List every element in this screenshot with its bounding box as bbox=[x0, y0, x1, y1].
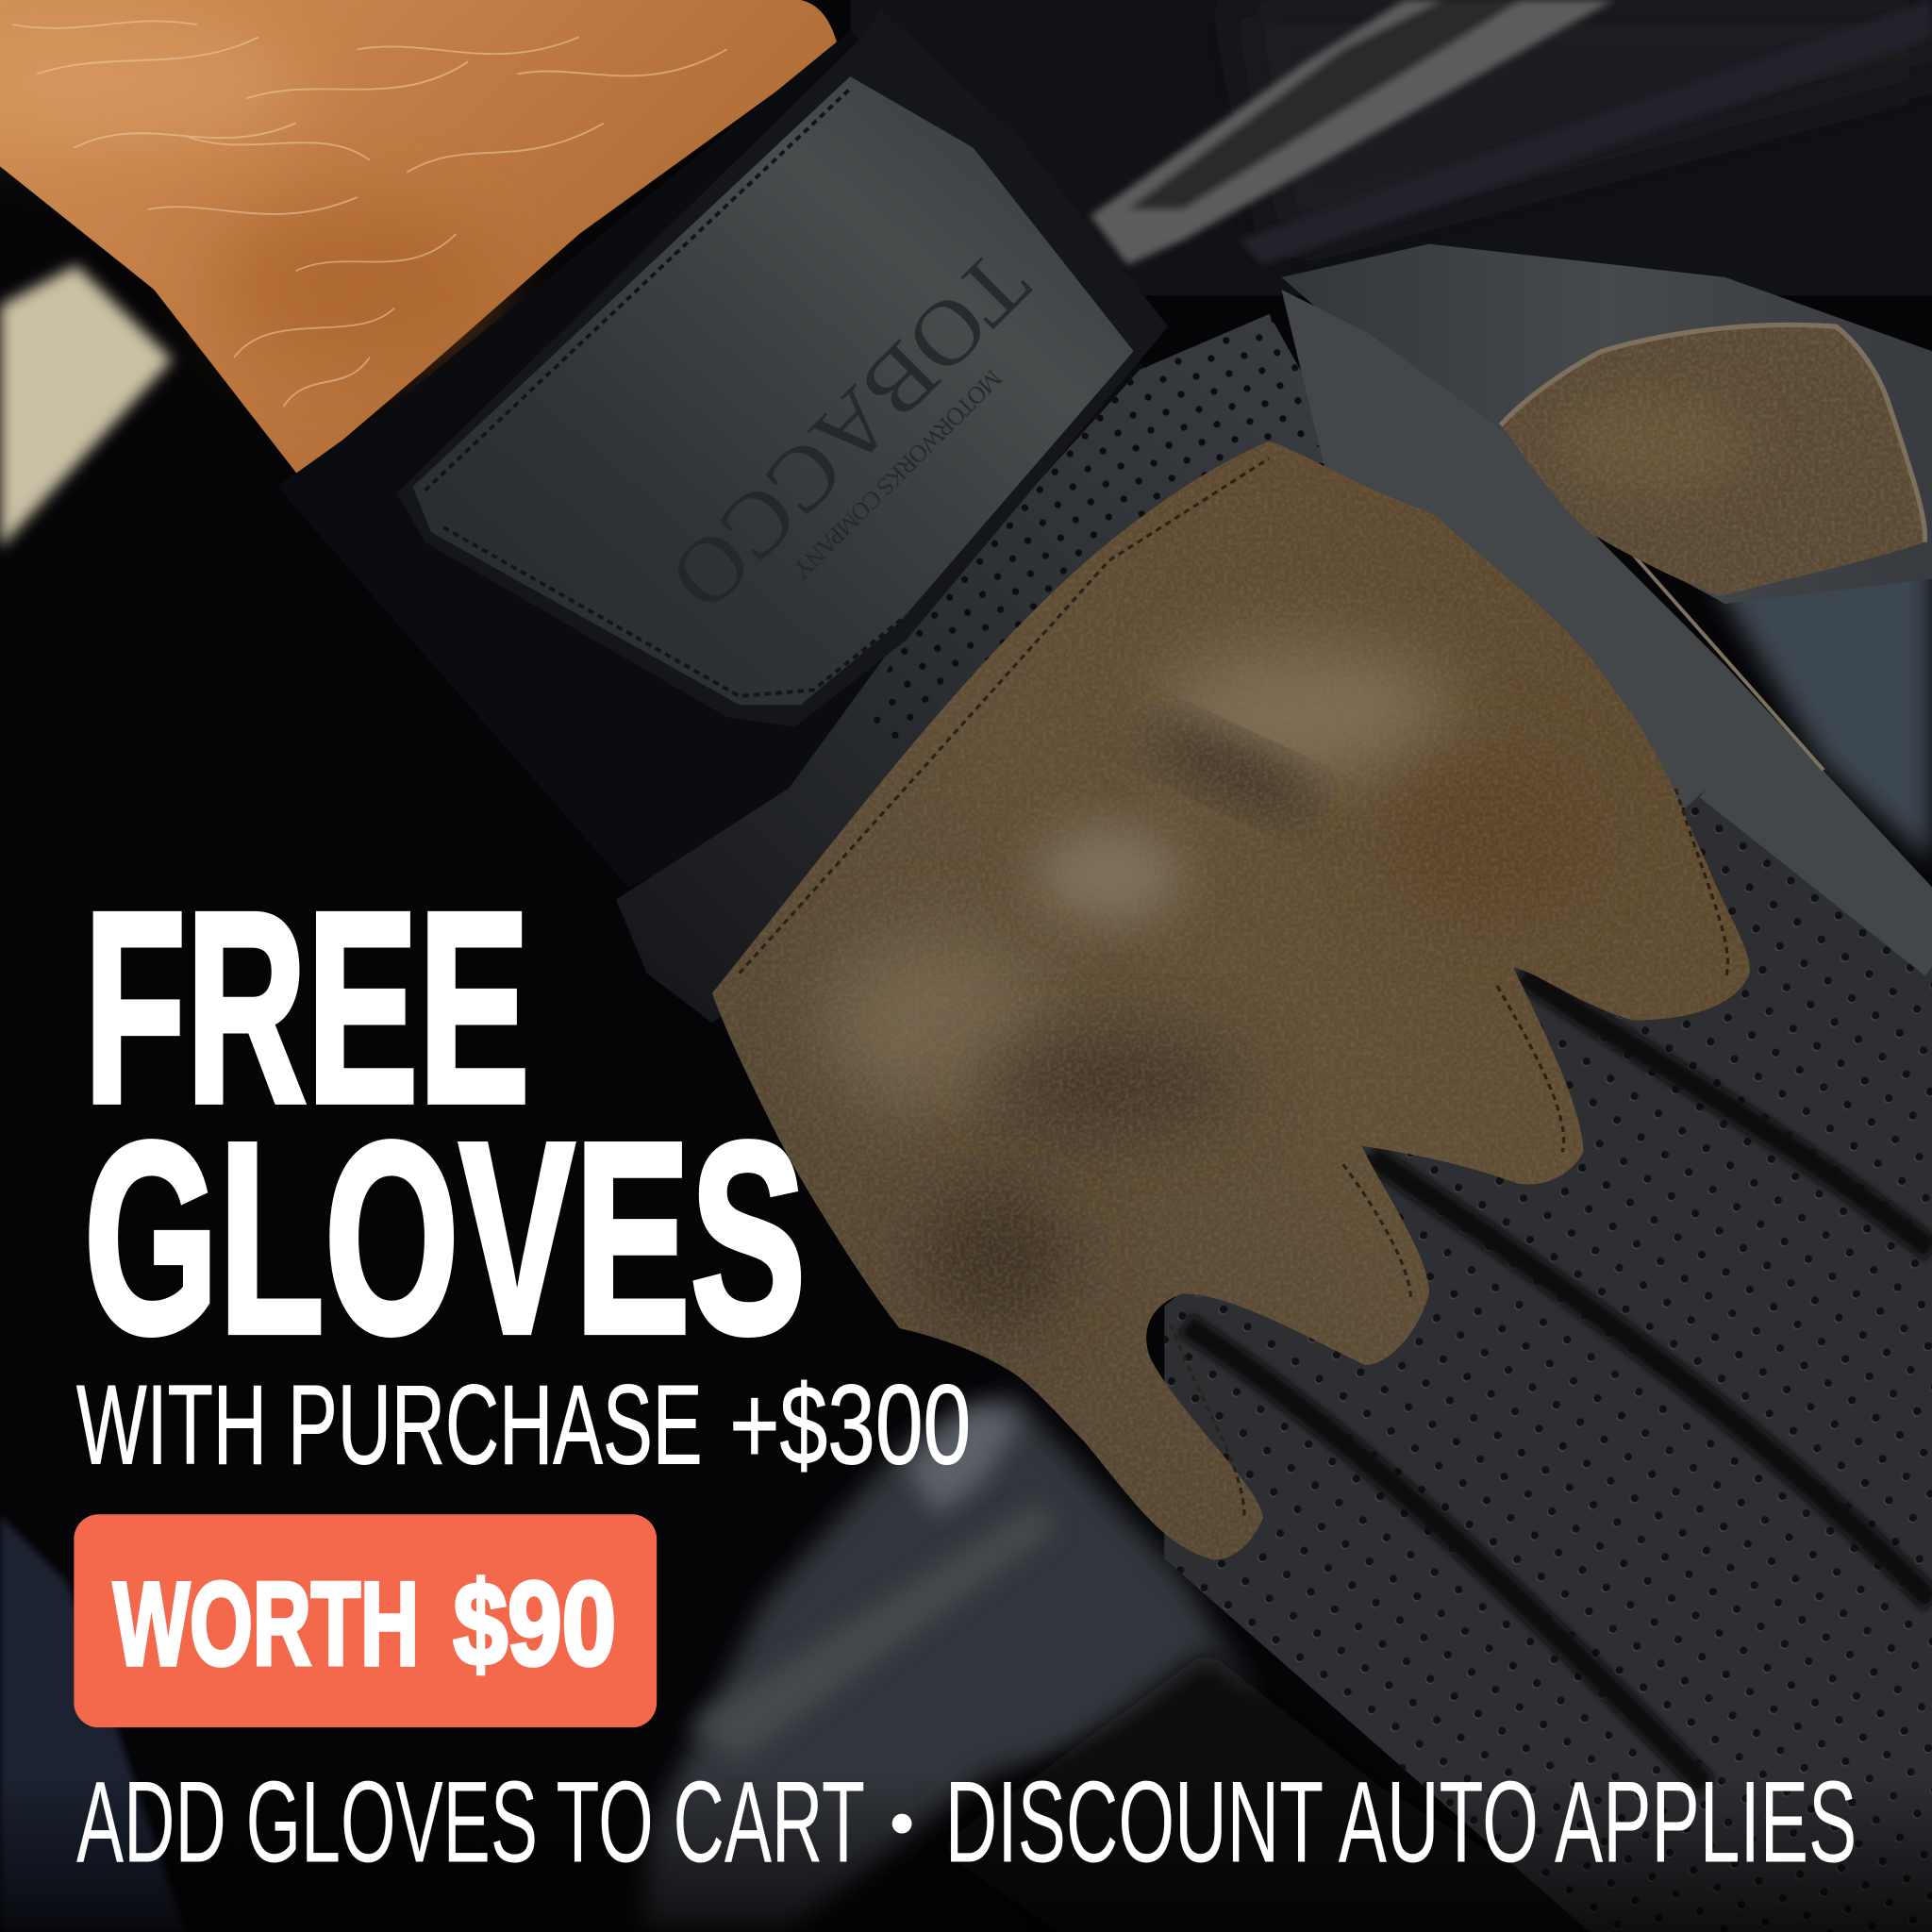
glove top leather bbox=[1281, 244, 1932, 986]
suede knuckle panel bbox=[690, 419, 1774, 1577]
brand deboss: TOBACCO bbox=[651, 232, 1049, 630]
headline: free gloves: GLOVES bbox=[84, 1087, 806, 1391]
forearm bbox=[0, 0, 838, 476]
badge: worth $90: WORTH bbox=[113, 1557, 419, 1690]
footer instruction: ADD GLOVES TO CART bbox=[76, 1758, 865, 1888]
headline: free gloves: FREE bbox=[84, 857, 530, 1160]
arm hair bbox=[12, 21, 727, 407]
bottom fade over glove bbox=[0, 1774, 1932, 1932]
subheading: +$300 bbox=[729, 1362, 971, 1489]
wrist strap bbox=[397, 9, 1168, 727]
headline: free gloves bbox=[84, 857, 806, 1391]
thumb suede patch bbox=[1491, 314, 1932, 604]
steering wheel spoke bbox=[1091, 0, 1932, 265]
badge: worth $90: $90 bbox=[454, 1557, 616, 1690]
brand deboss: MOTORWORKS COMPANY bbox=[788, 364, 1008, 584]
cuff leather band bbox=[616, 314, 1356, 1023]
finger gaps bbox=[1185, 974, 1932, 1787]
black sleeve bbox=[277, 31, 1232, 887]
beige background stripe bbox=[0, 265, 173, 548]
subheading: WITH PURCHASE bbox=[76, 1362, 702, 1489]
badge: worth $90 bbox=[74, 1514, 657, 1727]
suede stitching bbox=[740, 458, 1728, 1518]
glove fingers bbox=[1164, 789, 1932, 1932]
